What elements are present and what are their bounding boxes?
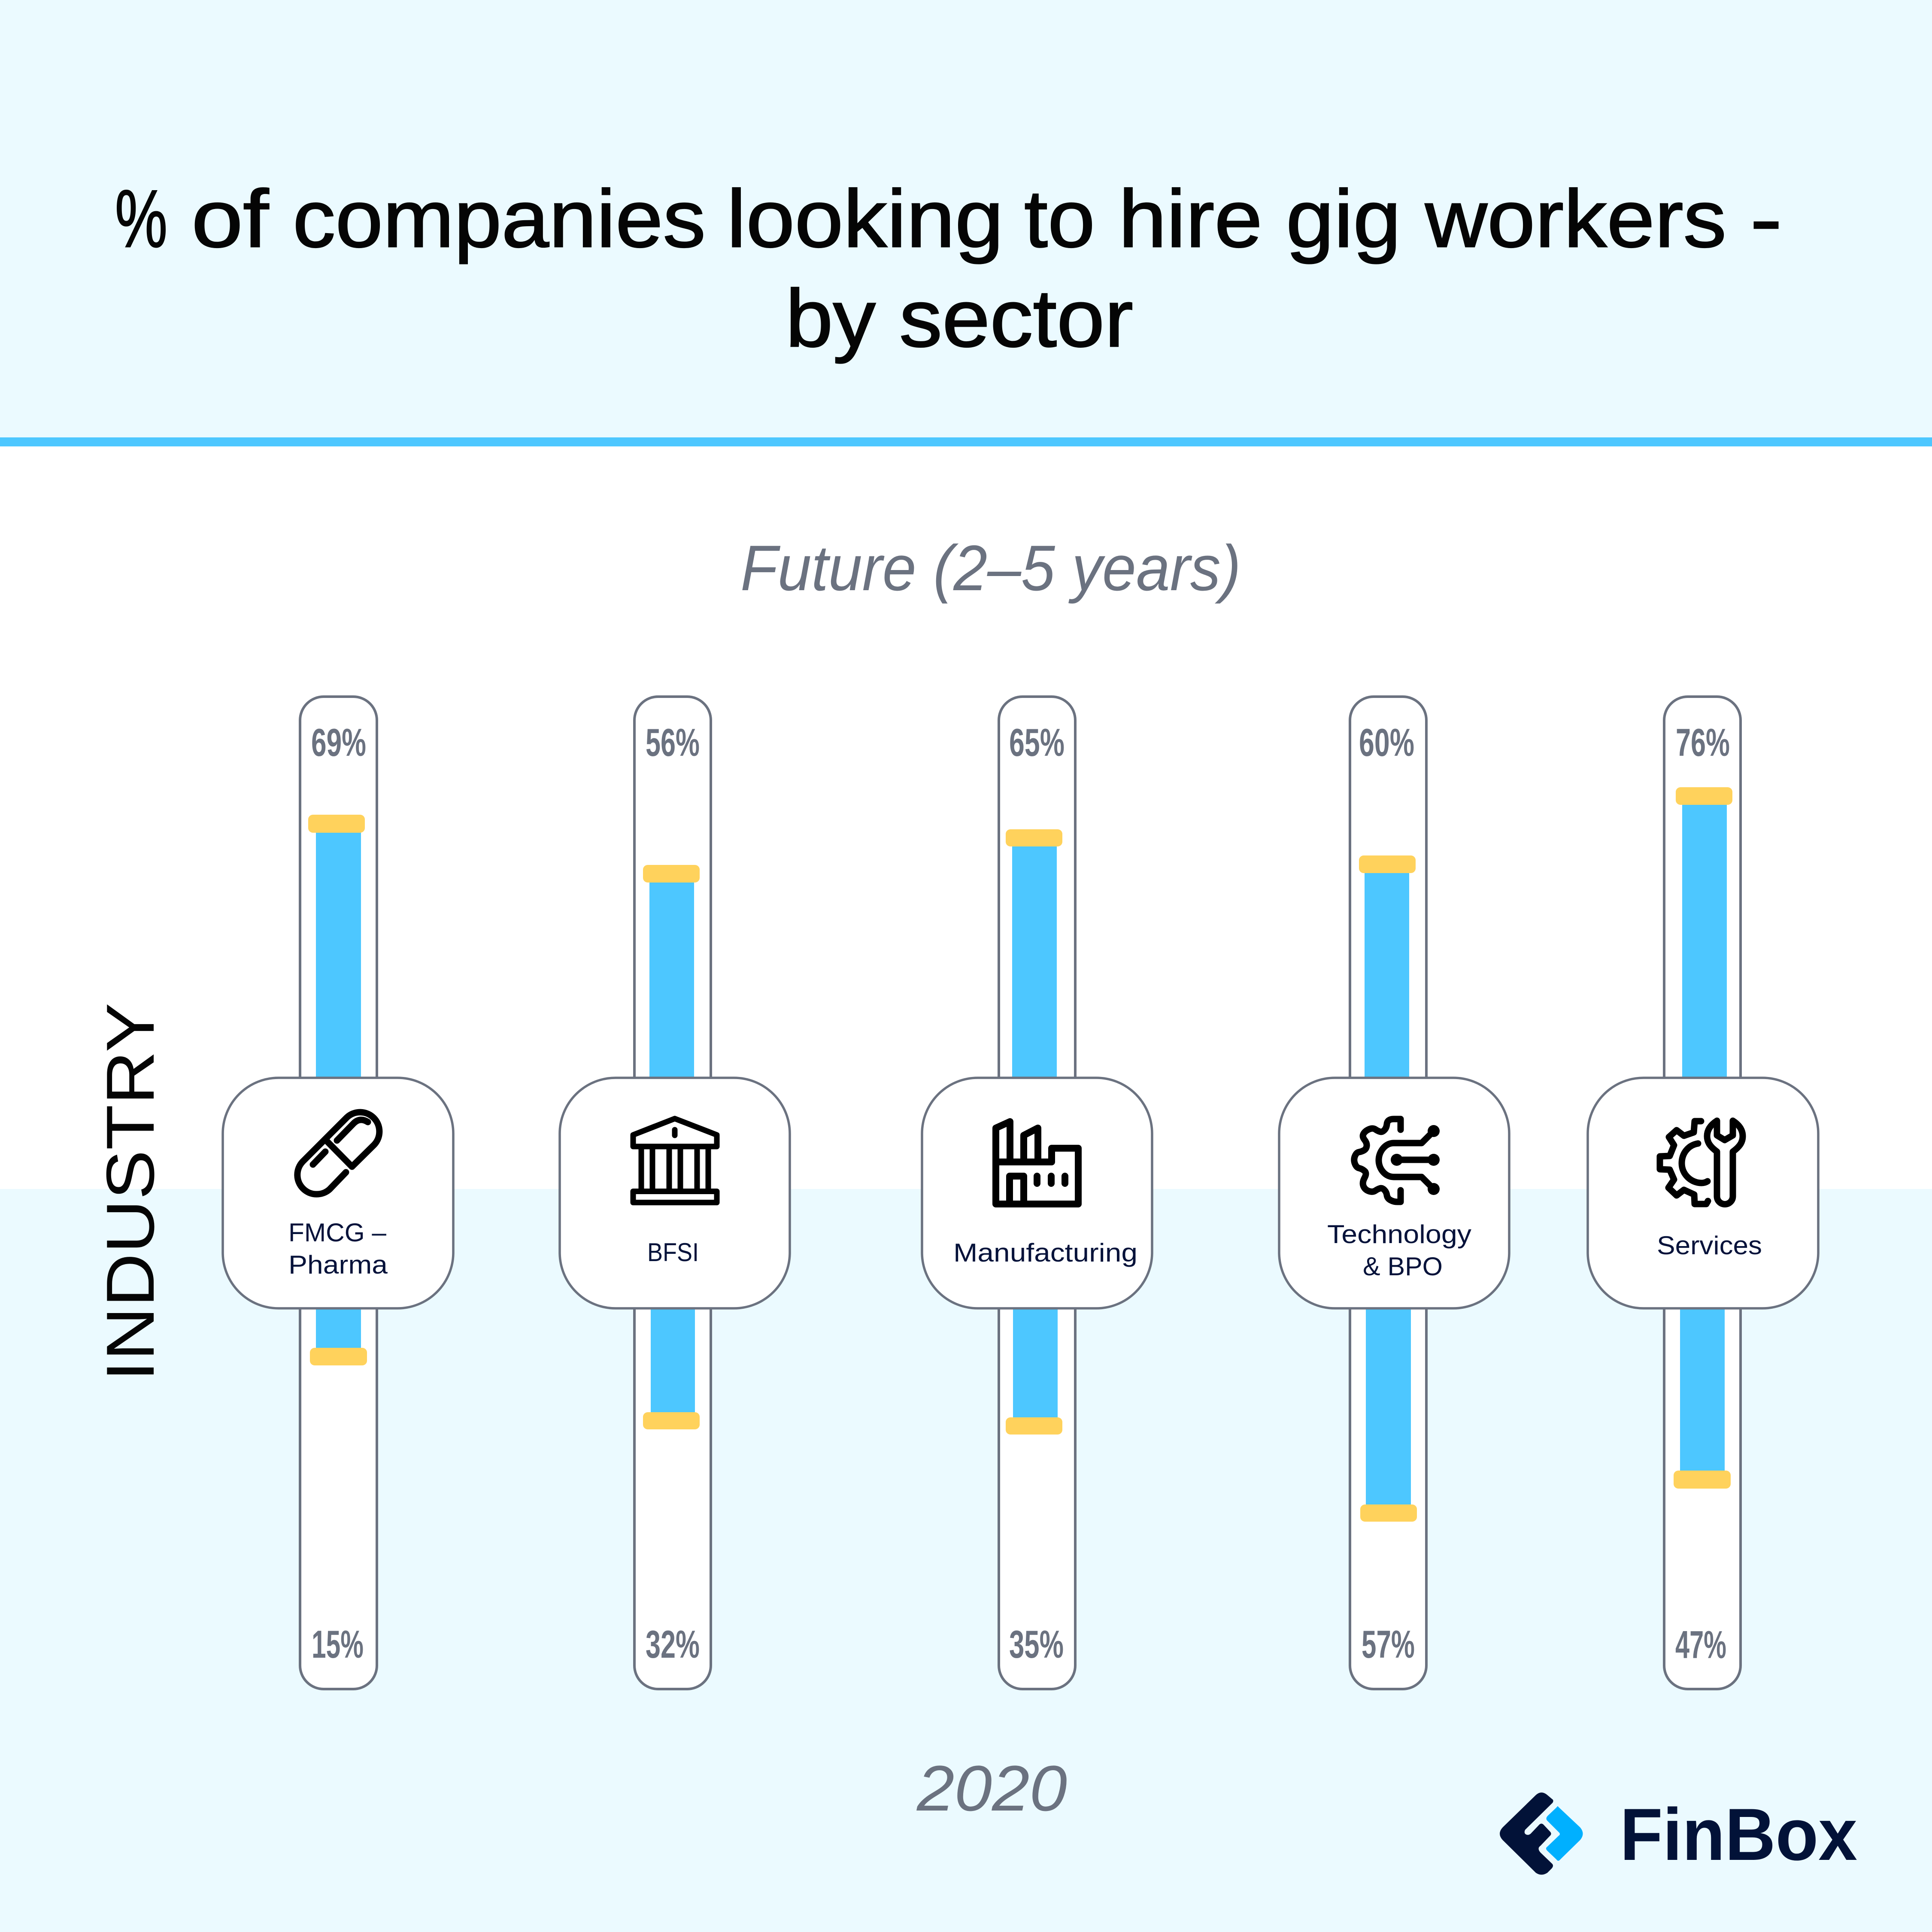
label: Technology and BPO: & BPO [1363,1252,1443,1281]
title: to [1024,173,1095,264]
label: Technology and BPO: Technology [1327,1220,1471,1249]
value: future 69%: 69% [311,721,366,764]
track: Manufacturing [999,697,1075,1689]
column: Services [1588,697,1818,1689]
bars: Manufacturing [1006,829,1062,1435]
value: future 65%: 65% [1009,721,1065,764]
title: sector [899,273,1133,364]
logo wordmark: FinBox [1620,1793,1857,1876]
card: BFSI [560,1078,790,1308]
bars: Services [1674,787,1732,1489]
value: future 60%: 60% [1359,721,1414,764]
title: - [1750,173,1782,264]
card: FMCG Pharma [223,1078,453,1308]
bottom axis label: 2020: 2020 [916,1752,1067,1824]
column: BFSI [560,697,790,1689]
value: 2020 35%: 35% [1009,1623,1064,1666]
track: Services [1664,697,1741,1689]
icon: bank [633,1119,717,1203]
label: FMCG Pharma: Pharma [288,1250,388,1279]
icon: factory [996,1122,1078,1204]
top axis label: future: Future (2–5 years) [740,532,1241,604]
value: future 76%: 76% [1676,721,1730,764]
title: gig [1286,173,1401,264]
logo: FinBox [1500,1792,1857,1876]
title: looking [727,173,1004,264]
column: Manufacturing [922,697,1152,1689]
title: by [786,273,876,364]
header band [0,0,1932,439]
label: FMCG Pharma: FMCG – [288,1218,387,1247]
label: Technology and BPO [1327,1220,1471,1281]
column: FMCG Pharma [223,697,453,1689]
title: hire [1119,173,1262,264]
title: % [115,173,167,264]
title: workers [1425,173,1726,264]
value: 2020 57%: 57% [1362,1623,1415,1666]
logo mark [1500,1792,1583,1875]
label: BFSI: BFSI [647,1238,699,1267]
lower background band [0,1189,1932,1932]
title [115,173,1782,364]
bars: FMCG Pharma [308,815,367,1365]
icon: gear and wrench [1660,1121,1743,1204]
track: FMCG Pharma [300,697,377,1689]
value: future 56%: 56% [646,721,700,764]
card: Technology and BPO [1279,1078,1509,1308]
icon: tech gear [1354,1119,1440,1202]
column: Technology and BPO [1279,697,1509,1689]
track: BFSI [634,697,711,1689]
title: of [191,173,269,264]
icon: capsule [297,1112,379,1194]
side axis label: industry: INDUSTRY [93,1003,168,1381]
value: 2020 15%: 15% [312,1623,364,1666]
card: Manufacturing [922,1078,1152,1308]
label: Services: Services [1657,1231,1762,1260]
value: 2020 47%: 47% [1675,1623,1726,1667]
track: Technology and BPO [1350,697,1426,1689]
title: companies [293,173,706,264]
label: FMCG Pharma [288,1218,388,1279]
header rule [0,437,1932,446]
bars: Technology and BPO [1359,855,1417,1522]
bars: BFSI [643,865,700,1429]
value: 2020 32%: 32% [646,1623,700,1666]
card: Services [1588,1078,1818,1308]
label: Manufacturing: Manufacturing [953,1238,1137,1267]
